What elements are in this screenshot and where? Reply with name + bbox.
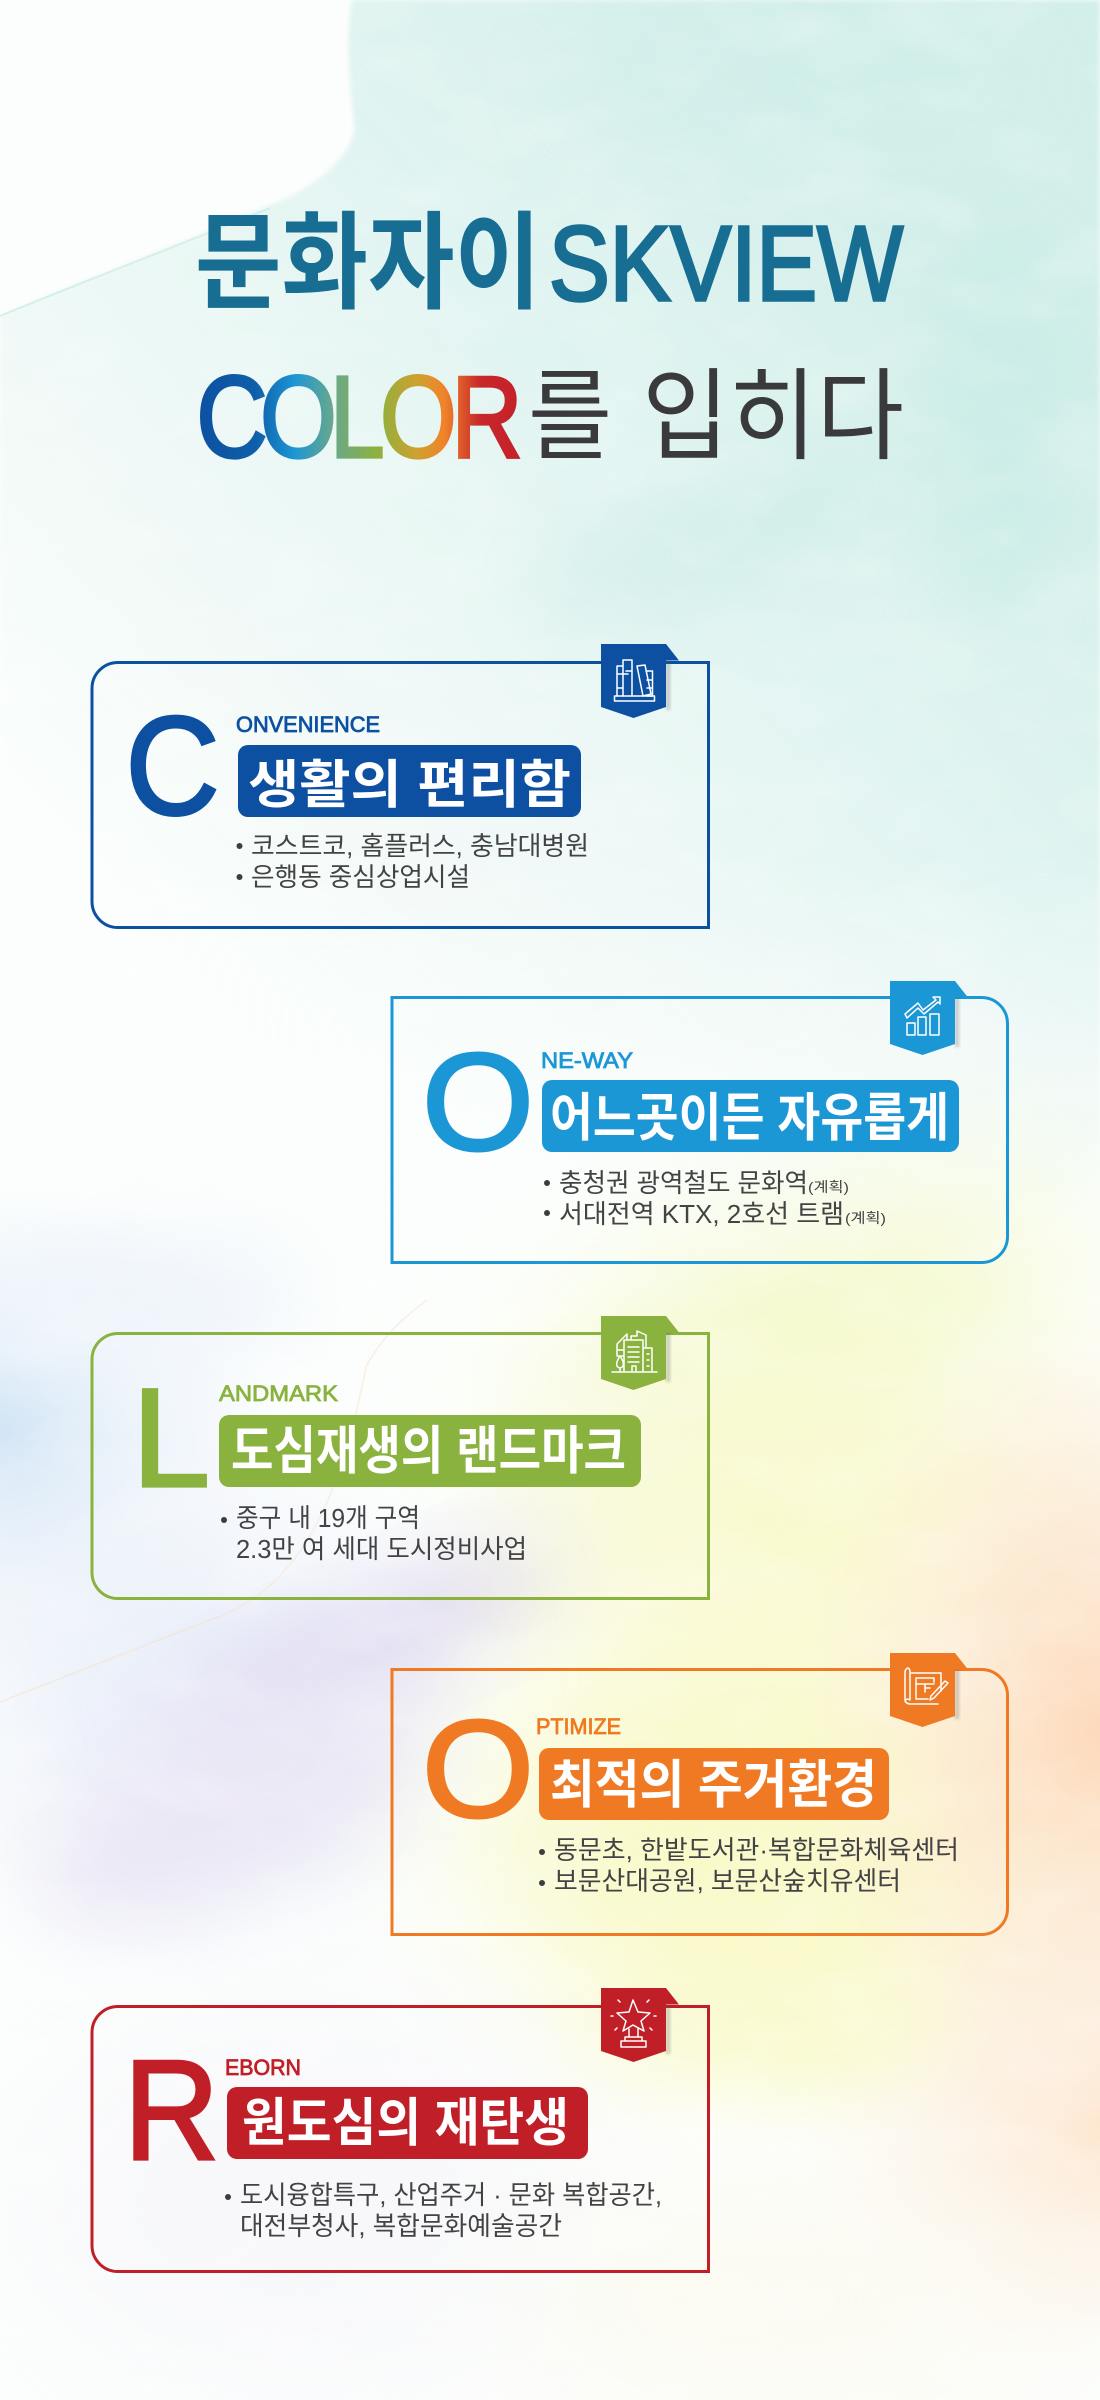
label ANDMARK: ANDMARK: [219, 1381, 338, 1406]
heading pill: 어느곳이든 자유롭게: [550, 1090, 949, 1148]
card border: [92, 1334, 708, 1598]
panel: O optimize: [392, 1653, 1008, 1935]
card border: [392, 1669, 1008, 1935]
badge with growth chart icon: [890, 981, 968, 1055]
badge with blueprint icon: [890, 1653, 968, 1727]
bullet list: 동문초, 한밭도서관·복합문화체육센터: [554, 1835, 959, 1865]
card border: [92, 662, 708, 928]
badge with books icon: [601, 644, 679, 718]
bullet list: [544, 1168, 886, 1229]
bullet list: 2.3만 여 세대 도시정비사업: [236, 1534, 527, 1564]
title: COLOR를 입히다: [196, 352, 904, 482]
panel: L landmark: [92, 1316, 708, 1598]
heading pill: 생활의 편리함: [248, 757, 571, 815]
big letter O: O: [422, 1692, 534, 1846]
badge with star trophy icon: [601, 1988, 679, 2062]
badge with buildings icon: [601, 1316, 679, 1390]
big letter C: C: [126, 687, 220, 844]
bullet list: [225, 2180, 662, 2241]
title: COLOR를 입히다: 입히다: [642, 361, 904, 473]
bullet list: [236, 831, 589, 892]
heading pill: 최적의 주거환경: [550, 1757, 877, 1815]
label ONVENIENCE: ONVENIENCE: [236, 712, 380, 737]
label NE-WAY: NE-WAY: [541, 1048, 633, 1073]
heading pill: 도심재생의 랜드마크: [231, 1423, 626, 1481]
card border: [392, 997, 1008, 1263]
big letter R: R: [124, 2031, 219, 2190]
bullet list: [539, 1835, 959, 1896]
bullet list: 서대전역 KTX, 2호선 트램: [559, 1199, 844, 1229]
label EBORN: EBORN: [225, 2055, 301, 2080]
title: 문화자이SKVIEW: [195, 205, 903, 323]
heading pill: 원도심의 재탄생: [242, 2095, 569, 2153]
title: 문화자이SKVIEW: 문화자이: [195, 205, 541, 323]
bullet list: 은행동 중심상업시설: [251, 862, 470, 892]
big letter O: O: [422, 1026, 534, 1180]
panel: R reborn: [92, 1988, 708, 2272]
bullet list: 보문산대공원, 보문산숲치유센터: [554, 1866, 901, 1896]
bullet list: (계획): [808, 1179, 849, 1195]
title: COLOR를 입히다: COLOR: [196, 352, 523, 482]
bullet list: 중구 내 19개 구역: [236, 1503, 420, 1533]
bullet list: (계획): [845, 1210, 886, 1226]
panel: C convenience: [92, 644, 708, 928]
title: COLOR를 입히다: 를: [528, 361, 612, 473]
label PTIMIZE: PTIMIZE: [536, 1714, 621, 1739]
card border: [92, 2006, 708, 2272]
bullet list: 코스트코, 홈플러스, 충남대병원: [251, 831, 589, 861]
soft colour washes: [0, 1134, 1100, 2390]
bullet list: 도시융합특구, 산업주거 · 문화 복합공간,: [240, 2180, 662, 2210]
panel: O one-way: [392, 981, 1008, 1263]
big letter L: L: [132, 1359, 210, 1516]
title: 문화자이SKVIEW: SKVIEW: [549, 205, 903, 323]
bullet list: 대전부청사, 복합문화예술공간: [240, 2211, 562, 2241]
bullet list: [221, 1503, 527, 1564]
bullet list: 충청권 광역철도 문화역: [559, 1168, 808, 1198]
